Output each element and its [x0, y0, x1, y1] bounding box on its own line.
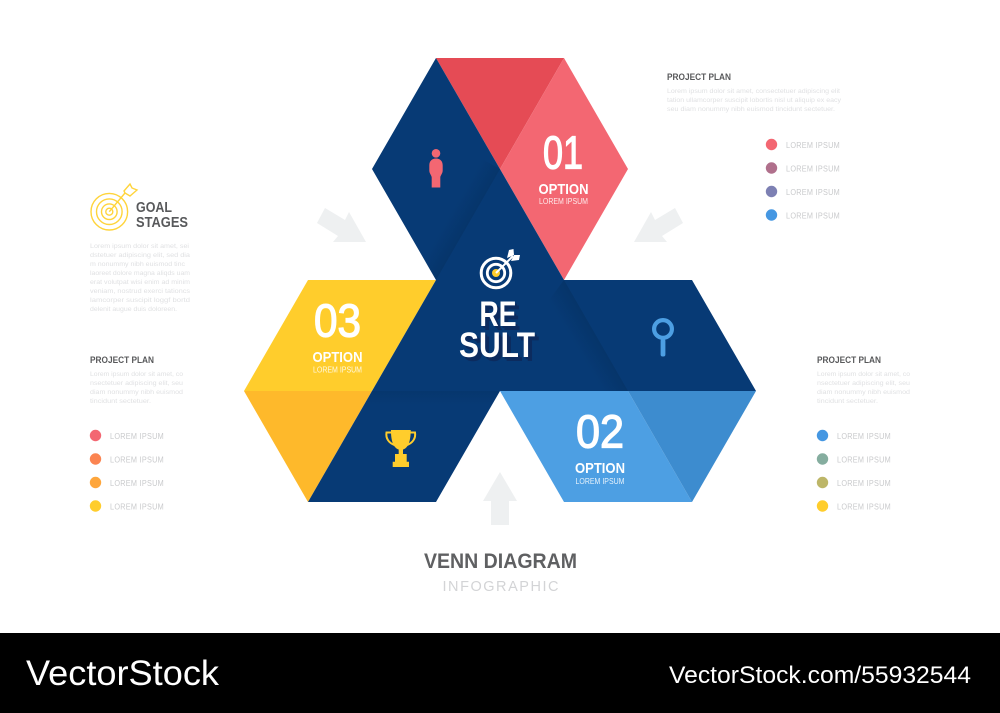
label: option 01 [538, 126, 588, 206]
segment: red dark triangle [436, 58, 564, 169]
label: option 01: 01 [543, 126, 583, 178]
label: option 01: OPTION [538, 181, 588, 198]
label: option 02: OPTION [575, 460, 625, 477]
text block: goal stages: laoreet dolore magna aliqds uam [90, 270, 191, 277]
fold shadow: lower [364, 391, 500, 405]
text block: project plan top right [667, 72, 842, 113]
footer bar [0, 633, 1000, 713]
segment: yellow dark triangle [244, 391, 372, 502]
legend: top right [766, 139, 840, 221]
venn diagram [244, 58, 756, 502]
text block: project plan left: nsectetuer adipiscing elit, seu [90, 380, 183, 387]
label: option 02: 02 [576, 406, 624, 458]
legend: right [817, 430, 891, 512]
text block: project plan right: nsectetuer adipiscing elit, seu [817, 380, 910, 387]
text block: project plan top right: seu diam nonummy nibh euismod tincidunt sectetuer. [667, 106, 835, 113]
segment: blue parallelogram [500, 391, 692, 502]
text block: goal stages: dstetuer adipiscing elit, sed dia [90, 252, 190, 259]
text block: goal stages: erat volutpat wisi enim ad minim [90, 279, 191, 286]
text block: project plan top right: tation ullamcorper suscipit lobortis nisl ut aliquip ex eacy [667, 97, 842, 104]
legend: left: LOREM IPSUM [110, 456, 164, 464]
text block: project plan left [90, 355, 183, 405]
text block: project plan left: tincidunt sectetuer. [90, 398, 151, 405]
text block: goal stages: m nonummy nibh euismod tinc [90, 261, 186, 268]
result text: RE [484, 299, 520, 338]
legend: left: LOREM IPSUM [110, 502, 164, 512]
arrow: top left [317, 208, 366, 242]
text block: project plan top right: PROJECT PLAN [667, 72, 731, 83]
text block: project plan right: PROJECT PLAN [817, 355, 881, 366]
text block: goal stages [90, 243, 191, 313]
text block: goal stages: Lorem ipsum dolor sit amet, sei [90, 243, 190, 250]
segment: yellow parallelogram [244, 280, 436, 391]
footer brand: VectorStock [26, 654, 220, 693]
text block: goal stages: veniam, nostrud exerci tationcs [90, 288, 191, 295]
icon: trophy [386, 430, 415, 467]
footer url: VectorStock.com/55932544 [669, 662, 971, 689]
label: option 01: LOREM IPSUM [539, 196, 588, 206]
text block: project plan left: diam nonummy nibh euismod [90, 389, 183, 396]
text block: project plan top right: Lorem ipsum dolor sit amet, consectetuer adipiscing elit [667, 88, 840, 95]
label: option 03: 03 [314, 294, 361, 346]
legend: left: LOREM IPSUM [110, 479, 164, 488]
result text: SULT [463, 330, 539, 369]
legend: right: LOREM IPSUM [837, 456, 891, 464]
text block: goal stages: delenit augue duis doloreen. [90, 306, 177, 313]
result text [459, 295, 539, 369]
legend: top right: LOREM IPSUM [786, 164, 840, 174]
legend: right: LOREM IPSUM [837, 479, 891, 488]
legend: left [90, 430, 164, 512]
text block: project plan left: Lorem ipsum dolor sit amet, co [90, 371, 183, 378]
result text: SULT [459, 326, 535, 365]
icon: person [429, 149, 443, 188]
label: option 02: LOREM IPSUM [576, 476, 624, 486]
text block: goal stages: lamcorper suscipit loggf bortd [90, 297, 190, 304]
title: VENN DIAGRAM [424, 550, 577, 573]
legend: top right: LOREM IPSUM [786, 141, 840, 150]
text block: project plan right: diam nonummy nibh euismod [817, 389, 910, 396]
legend: right: LOREM IPSUM [837, 502, 891, 512]
legend: top right: LOREM IPSUM [786, 188, 840, 197]
heading: goal stages [136, 200, 188, 231]
arrow: top right [634, 208, 683, 242]
segment: blue dark triangle [628, 391, 756, 502]
label: option 03 [312, 294, 362, 374]
legend: left: LOREM IPSUM [110, 432, 164, 441]
text block: project plan left: PROJECT PLAN [90, 355, 154, 366]
legend: right: LOREM IPSUM [837, 432, 891, 441]
fold shadow: upper [418, 159, 500, 280]
text block: project plan right [817, 355, 910, 405]
fold shadow: right [546, 280, 628, 391]
text block: project plan right: tincidunt sectetuer. [817, 398, 878, 405]
heading: goal stages: GOAL [136, 200, 172, 216]
heading: goal stages: STAGES [136, 215, 188, 231]
icon: result target [481, 249, 520, 288]
segment: navy centre shape [308, 58, 756, 502]
result text: SULT [461, 328, 537, 367]
segment: red rhombus [500, 58, 628, 280]
icon: goal target [91, 184, 137, 230]
result text: RE [480, 295, 516, 334]
icon: magnifier [654, 320, 672, 356]
arrow: bottom [483, 472, 517, 525]
label: option 03: LOREM IPSUM [313, 364, 362, 374]
label: option 03: OPTION [312, 349, 362, 366]
legend: top right: LOREM IPSUM [786, 212, 840, 220]
subtitle: INFOGRAPHIC [442, 579, 558, 595]
label: option 02 [575, 406, 625, 486]
result text: RE [482, 297, 518, 336]
text block: project plan right: Lorem ipsum dolor sit amet, co [817, 371, 910, 378]
